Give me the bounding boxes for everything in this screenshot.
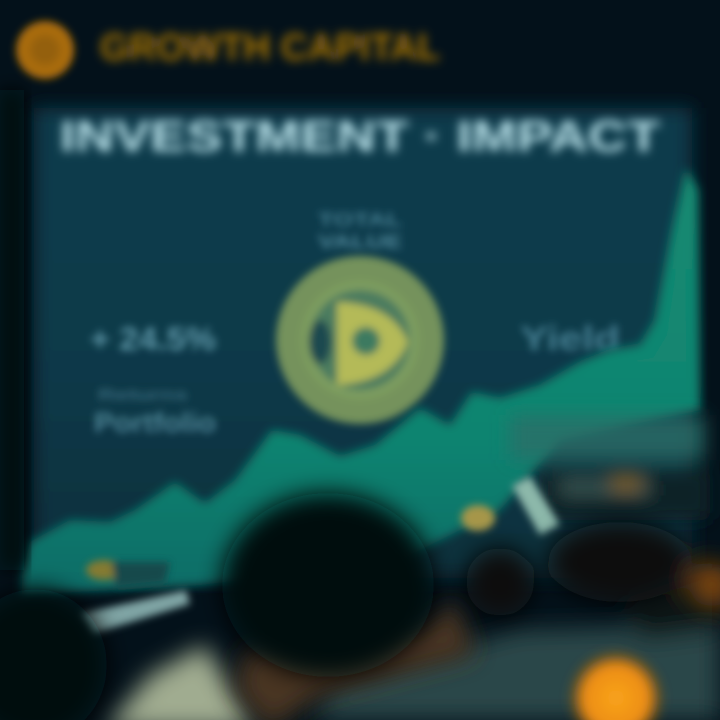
audience silhouette: lower floor — [105, 565, 720, 720]
small document and yellow marker — [461, 476, 560, 535]
logo icon — [16, 21, 74, 79]
title: INVESTMENT · IMPACT — [60, 112, 660, 161]
audience silhouette: center body — [235, 600, 475, 720]
left device: tablet — [80, 560, 190, 634]
header text: GROWTH CAPITAL — [100, 27, 440, 69]
top center label: TOTAL — [318, 210, 402, 230]
right text: stat: Yield — [520, 320, 620, 358]
area chart — [22, 168, 700, 595]
orange glow light — [566, 648, 666, 720]
audience silhouette: left — [0, 589, 107, 720]
left text: lower stat: Returns — [98, 387, 188, 404]
left text: upper stat: + 24.5% — [90, 321, 216, 357]
left text: lower stat — [94, 387, 216, 438]
center head shape — [222, 493, 434, 677]
left text: lower stat: Portfolio — [94, 407, 216, 438]
top center label — [318, 210, 402, 252]
top center label: VALUE — [318, 232, 402, 252]
left edge shadow — [0, 90, 24, 570]
icon: center coin — [276, 256, 444, 424]
audience silhouette: right heads — [466, 522, 720, 616]
right device cluster — [510, 415, 710, 520]
